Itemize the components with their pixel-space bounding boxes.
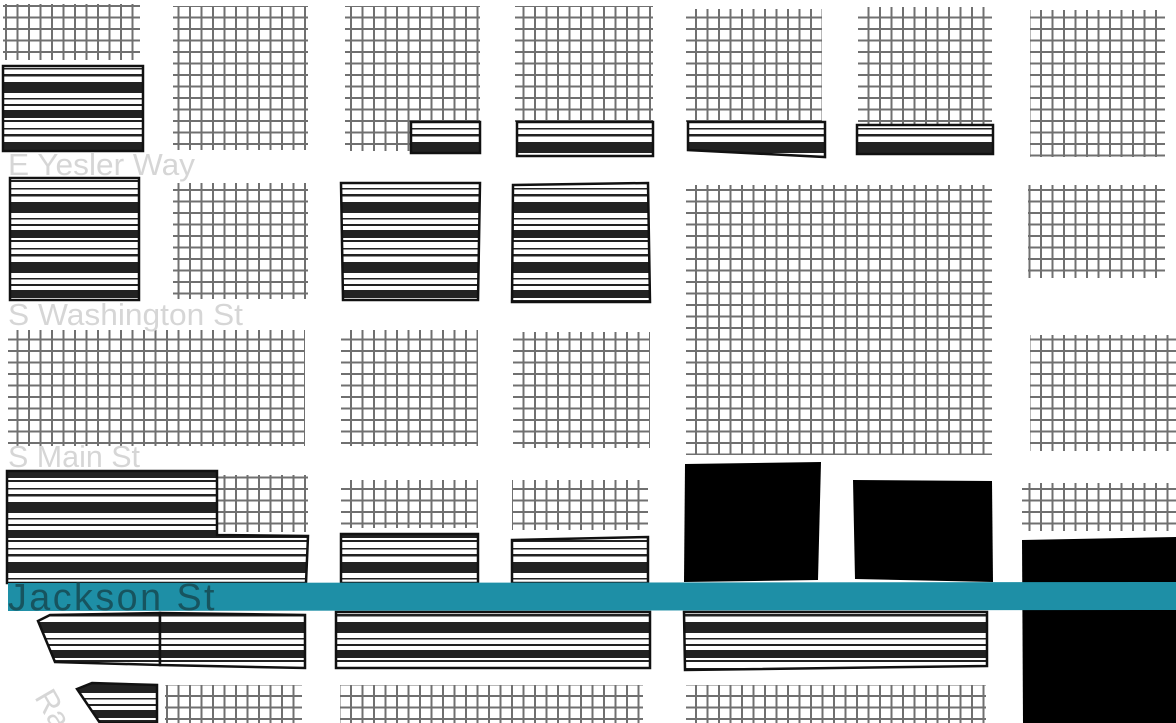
black blocks bbox=[684, 462, 1176, 723]
street: Jackson St bbox=[8, 577, 1176, 619]
striped blocks bbox=[3, 66, 993, 723]
street labels: E Yesler Way bbox=[8, 147, 196, 182]
street labels: S Washington St bbox=[8, 297, 243, 332]
street labels: S Main St bbox=[8, 439, 140, 474]
street: Jackson St: Jackson St bbox=[8, 577, 217, 619]
street labels bbox=[8, 147, 243, 723]
